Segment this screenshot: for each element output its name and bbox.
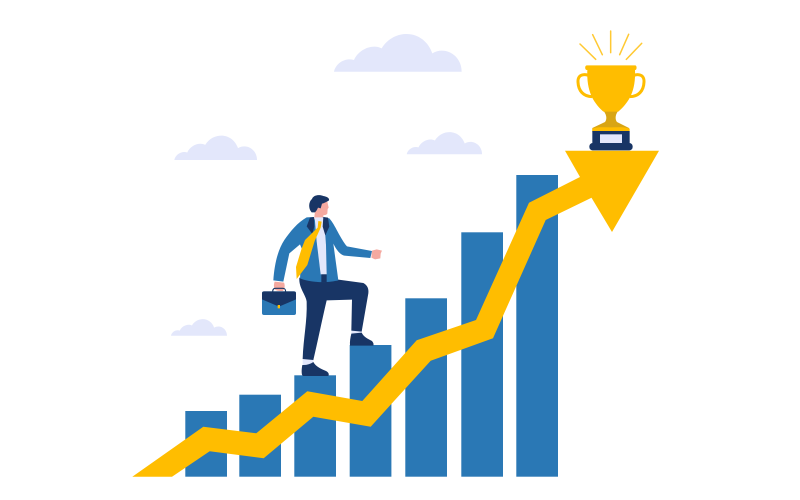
businessman xyxy=(262,195,382,376)
bar 2 xyxy=(239,395,281,477)
trophy plinth xyxy=(592,131,630,144)
briefcase flap xyxy=(262,291,296,307)
bar 7 xyxy=(516,175,558,477)
trophy foot xyxy=(589,143,633,150)
trophy plaque xyxy=(600,134,622,143)
bar 6 xyxy=(461,232,503,477)
front hand xyxy=(371,249,382,259)
rear arm hand xyxy=(274,282,285,291)
cloud: top centre xyxy=(334,34,462,72)
cloud: left xyxy=(174,136,257,160)
tie xyxy=(296,221,322,279)
bar 5 xyxy=(405,298,447,477)
head xyxy=(315,202,329,215)
lapels xyxy=(307,217,329,235)
trophy xyxy=(578,31,644,150)
trophy base band xyxy=(592,127,630,131)
clouds xyxy=(171,34,482,336)
cloud: right xyxy=(407,132,482,154)
trophy stem xyxy=(592,111,629,132)
briefcase xyxy=(262,288,296,315)
arrow: rising growth line xyxy=(132,151,659,477)
belt gap xyxy=(321,274,327,282)
bar 3 xyxy=(294,375,336,477)
briefcase handle xyxy=(273,288,286,292)
socks xyxy=(303,330,362,365)
briefcase body xyxy=(262,291,296,315)
trousers xyxy=(299,278,368,360)
bar chart xyxy=(185,175,558,477)
bar 1 xyxy=(185,411,227,477)
front shoe xyxy=(350,333,374,346)
trophy cup xyxy=(585,65,637,112)
cloud: small lower left xyxy=(171,319,227,336)
hair xyxy=(309,195,329,212)
trophy handles xyxy=(578,75,644,97)
rear shoe xyxy=(302,362,329,376)
jacket xyxy=(273,217,372,282)
bar 4 xyxy=(350,345,391,477)
neck xyxy=(314,208,323,220)
briefcase clasp xyxy=(278,305,280,308)
shirt xyxy=(315,217,327,274)
trophy rays xyxy=(580,31,642,59)
